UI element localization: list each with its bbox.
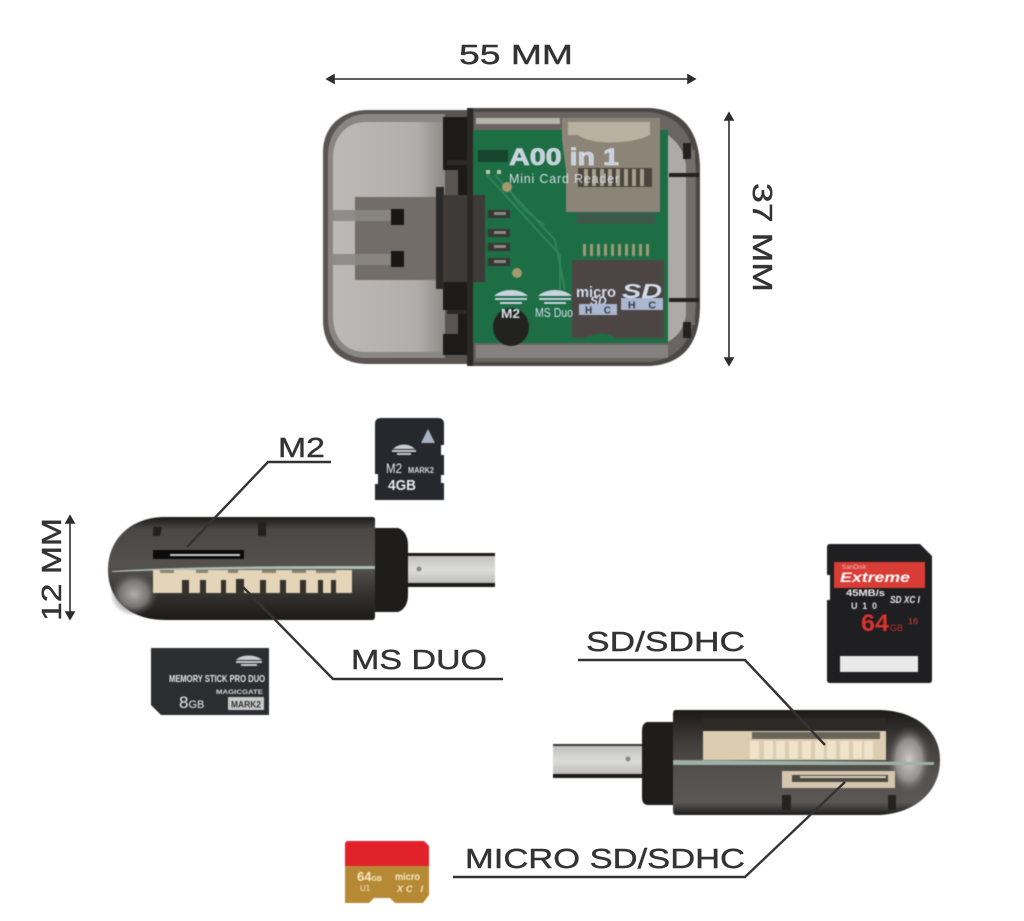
seam <box>467 108 473 366</box>
rear collar <box>642 722 673 805</box>
M2 memory card <box>375 418 444 500</box>
memory stick logo <box>392 444 416 455</box>
board small caption: Mini Card Reader <box>509 172 619 186</box>
capacity: 64GB <box>357 869 382 884</box>
callout label: micro SD/SDHC: MICRO SD/SDHC <box>465 843 745 874</box>
callout label: SD/SDHC: SD/SDHC <box>586 626 745 657</box>
micro SD slot <box>782 771 895 788</box>
top highlight <box>476 118 560 124</box>
micro SD card <box>345 841 429 903</box>
rear collar <box>375 528 408 612</box>
red band <box>345 841 429 866</box>
seam <box>673 760 934 765</box>
SD slot <box>703 731 886 760</box>
XC logo: XC I <box>396 884 423 894</box>
SD HC logo <box>621 281 663 312</box>
thickness value: 12 MM <box>36 518 67 621</box>
capacity: 8GB <box>179 693 204 712</box>
slot shadow <box>703 718 886 732</box>
translucent cap <box>323 110 470 364</box>
logo <box>236 656 262 666</box>
body shell <box>470 108 700 366</box>
micro SD HC logo <box>579 294 617 316</box>
side view reader: MS Duo and M2 slots <box>108 517 495 620</box>
body <box>673 710 940 815</box>
contact teeth <box>583 244 649 256</box>
mark text: MARK2 <box>408 466 434 475</box>
capacity: 64 <box>861 610 890 637</box>
leader: micro SD/SDHC <box>453 782 845 877</box>
height value: 37 MM <box>747 183 778 292</box>
capacity unit: GB <box>890 623 903 633</box>
card size text: M2 <box>386 460 402 476</box>
SD slot window <box>572 260 664 338</box>
leader: M2 <box>187 462 331 547</box>
micro SD HC logo: HC <box>585 306 611 316</box>
USB plug <box>553 744 642 778</box>
top view of card reader <box>323 108 700 366</box>
micro SD logo: micro <box>576 285 616 301</box>
callout label: M2: M2 <box>278 432 325 463</box>
surface tabs <box>153 522 266 536</box>
nose highlight <box>887 726 931 794</box>
side view reader: SD and micro SD slots <box>553 710 940 815</box>
callout label: MS Duo: MS DUO <box>351 644 487 675</box>
height arrow <box>725 113 733 365</box>
capacity: 4GB <box>388 477 416 494</box>
SD slot teeth <box>752 732 880 739</box>
SD HC logo: SD <box>622 281 662 303</box>
board contact pads <box>488 210 510 266</box>
brand: SanDisk <box>842 564 867 571</box>
leader: SD/SDHC <box>578 660 825 745</box>
mark text: MARK2 <box>231 700 261 710</box>
speed: 45MB/s <box>846 588 885 598</box>
M2 board logo <box>493 290 529 346</box>
class marks: U10 <box>851 601 877 611</box>
dimension label: 37 mm <box>725 113 778 365</box>
U1 mark: U1 <box>360 884 371 893</box>
bottom strip <box>476 345 668 358</box>
body <box>108 517 375 620</box>
micro logo: micro <box>395 872 420 883</box>
dimension label: 55 mm <box>327 39 695 83</box>
product name: Extreme <box>840 569 910 585</box>
white strip <box>840 656 918 672</box>
SD card SanDisk Extreme <box>827 544 932 683</box>
red label <box>834 562 925 588</box>
M2 board logo: M2 <box>501 306 520 321</box>
circuit traces <box>487 175 565 290</box>
seam <box>112 566 375 572</box>
shell edge marks <box>669 143 699 338</box>
nose highlight <box>110 572 158 616</box>
width value: 55 MM <box>459 39 573 70</box>
triangle mark <box>421 429 435 443</box>
USB collar <box>436 187 444 289</box>
MS Duo board logo <box>535 290 573 320</box>
USB plug <box>408 553 495 587</box>
MS Duo board logo: MS Duo <box>535 306 573 320</box>
slot contacts <box>182 579 336 594</box>
MS Duo slot <box>153 570 352 593</box>
SD HC logo: HC <box>628 300 656 312</box>
leader: MS Duo <box>243 587 503 679</box>
micro SD slot <box>562 118 660 212</box>
surface tabs <box>782 795 896 810</box>
component row <box>577 213 655 224</box>
width arrow <box>327 75 695 83</box>
USB plug <box>355 197 438 280</box>
hours: 16 <box>908 617 919 626</box>
mark badge <box>228 697 264 710</box>
MagicGate: MAGICGATE <box>216 690 263 696</box>
micro SD HC logo: SD <box>590 294 607 308</box>
Memory Stick PRO Duo card <box>151 648 269 715</box>
circuit board <box>473 130 668 343</box>
board title: A00 in 1 <box>509 144 619 171</box>
SD XC logo: SD XC I <box>890 595 920 606</box>
right window light <box>668 135 686 342</box>
black frame <box>443 117 470 355</box>
M2 slot <box>153 550 244 559</box>
thickness arrow <box>66 516 74 619</box>
card name: MEMORY STICK PRO DUO <box>169 673 265 685</box>
12 mm thickness dimension <box>36 516 74 621</box>
